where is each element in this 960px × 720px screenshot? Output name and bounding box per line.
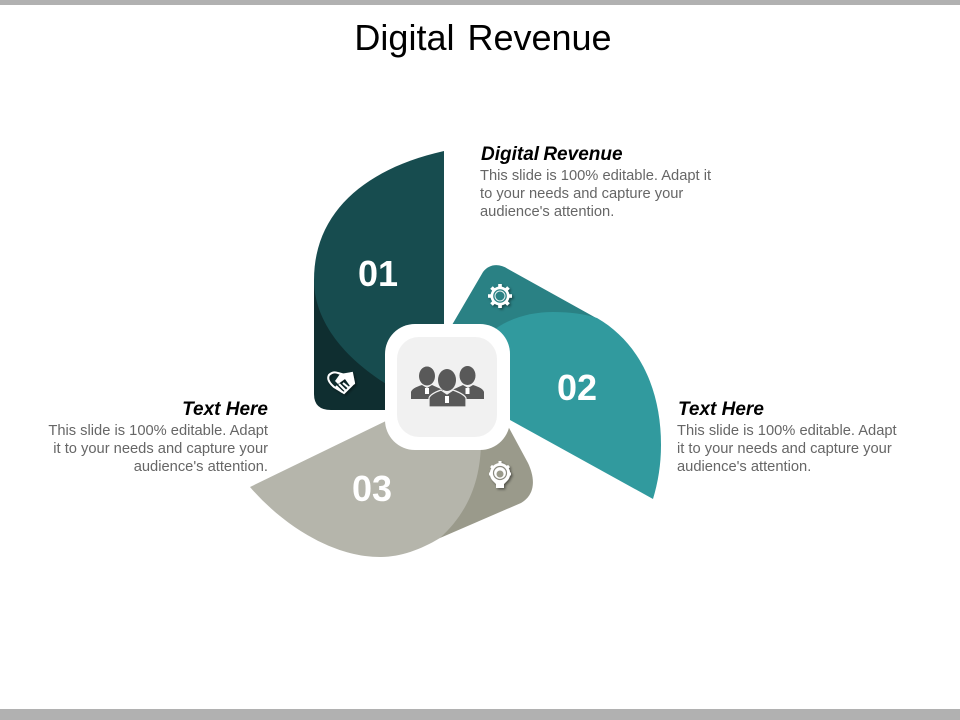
segment 01 — [314, 151, 444, 410]
text block: Digital Revenue: This slide is 100% editable. Adapt it — [480, 168, 711, 184]
text block: left Text Here: it to your needs and capture your — [53, 441, 268, 457]
bottom bar — [0, 709, 960, 720]
text block: left Text Here: Text Here — [182, 399, 268, 420]
text block: right Text Here: This slide is 100% editable. Adapt — [677, 423, 897, 439]
text block: right Text Here: it to your needs and capture your — [677, 441, 892, 457]
text block: left Text Here: audience's attention. — [134, 459, 268, 475]
number 03: 03 — [352, 468, 392, 509]
text block: right Text Here: audience's attention. — [677, 459, 811, 475]
center badge — [385, 324, 510, 450]
text block: right Text Here: Text Here — [678, 399, 764, 420]
number 01: 01 — [358, 253, 398, 294]
text block: left Text Here — [48, 399, 268, 475]
title: Digital Revenue — [354, 17, 612, 58]
top bar — [0, 0, 960, 5]
icon: gear — [488, 284, 512, 308]
text block: left Text Here: This slide is 100% editable. Adapt — [48, 423, 268, 439]
text block: right Text Here — [677, 399, 897, 475]
icon: light bulb gear — [489, 461, 511, 488]
segment 02 — [452, 265, 661, 499]
text block: Digital Revenue: Digital Revenue — [481, 144, 623, 165]
icon: three people — [411, 366, 484, 407]
number 02: 02 — [557, 367, 597, 408]
text block: Digital Revenue — [480, 144, 711, 220]
text block: Digital Revenue: to your needs and capture your — [480, 186, 683, 202]
icon: handshake — [328, 372, 355, 393]
text block: Digital Revenue: audience's attention. — [480, 204, 614, 220]
segment 03 — [250, 419, 533, 557]
